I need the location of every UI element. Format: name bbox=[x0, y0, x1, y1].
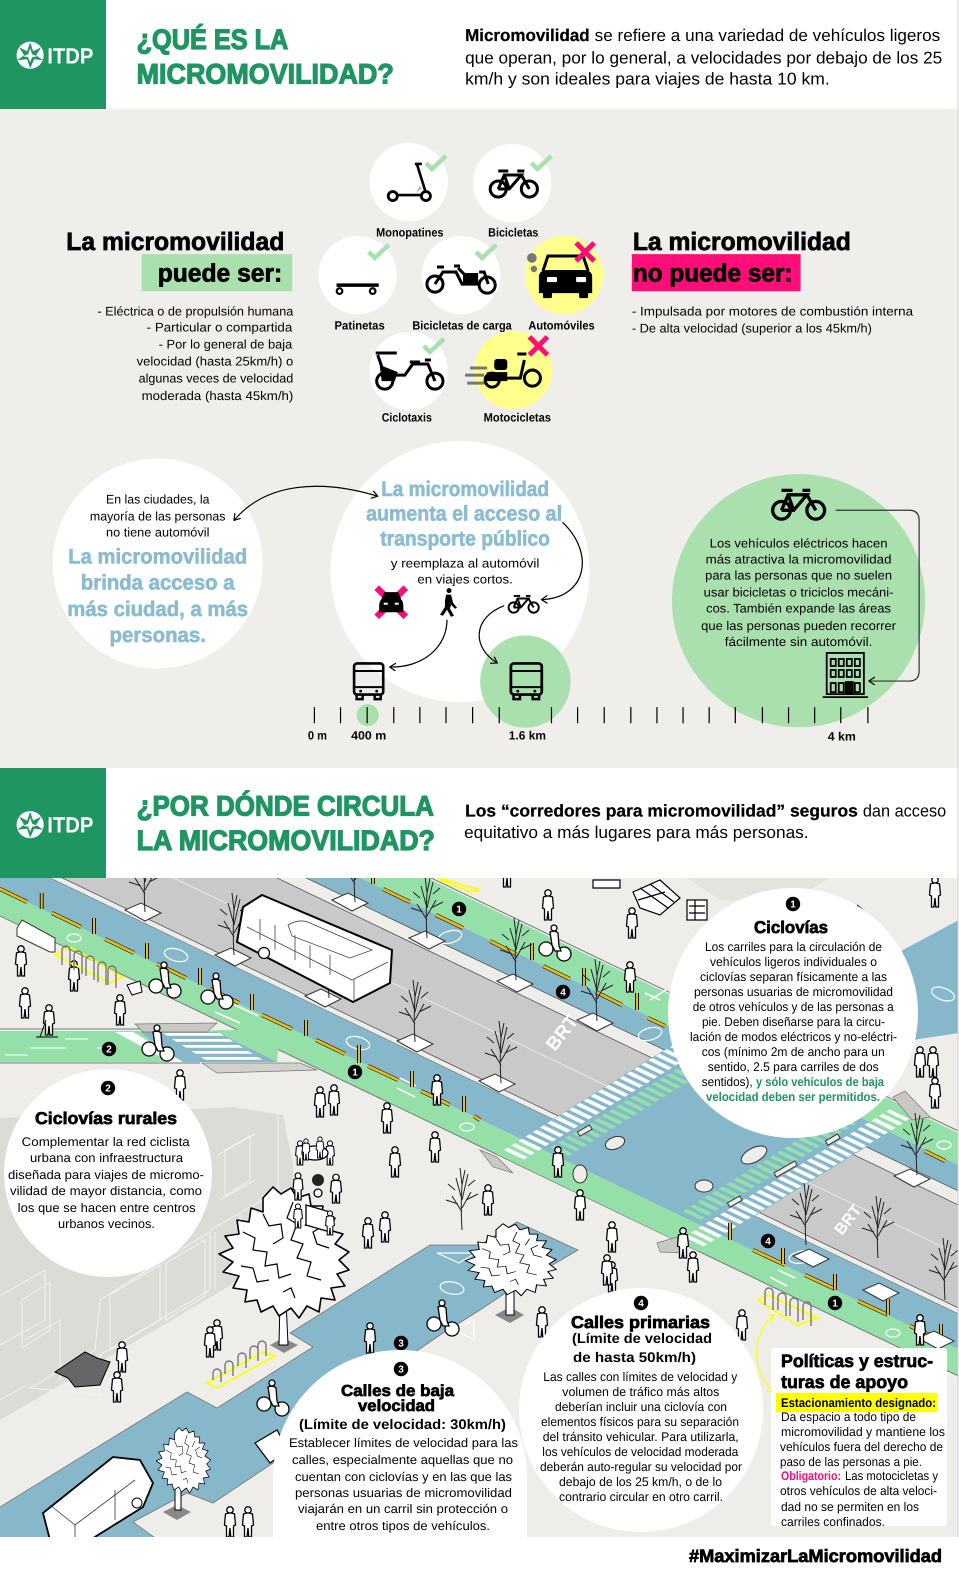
intro text: dan acceso bbox=[863, 802, 946, 821]
body: otros vehículos de alta veloci- bbox=[780, 1484, 937, 1498]
body: Establecer límites de velocidad para las bbox=[289, 1436, 518, 1450]
icon: motocicletas: Motocicletas bbox=[484, 410, 551, 424]
body bbox=[540, 1370, 742, 1504]
cross street NE bbox=[902, 920, 958, 1040]
list: no puede ser: - Impulsada por motores de combustión interna bbox=[632, 304, 913, 318]
distance scale bbox=[308, 704, 868, 743]
body bbox=[289, 1436, 518, 1533]
icon: motocicletas bbox=[465, 331, 552, 424]
ticks bbox=[314, 707, 868, 723]
body: cos (mínimo 2m de ancho para un bbox=[702, 1045, 885, 1059]
body: sentidos), bbox=[702, 1075, 753, 1089]
body: vehículos fuera del derecho de bbox=[780, 1440, 943, 1454]
BRT road text: BRT bbox=[542, 1011, 583, 1055]
heading: velocidad bbox=[358, 1398, 435, 1415]
badge 3: 3 bbox=[398, 1364, 404, 1376]
body: elementos físicos para su separación bbox=[541, 1415, 739, 1429]
panel: ciclovias bbox=[668, 888, 918, 1138]
body: Obligatorio: bbox=[781, 1469, 841, 1483]
illustration: isometric street: BRT bbox=[832, 1202, 866, 1238]
icon: edificio bbox=[823, 653, 868, 697]
intro text bbox=[465, 26, 942, 88]
body: paso de las personas a pie. bbox=[780, 1455, 922, 1469]
text: acceso: mayoría de las personas bbox=[90, 509, 226, 523]
hashtag: #MaximizarLaMicromovilidad bbox=[689, 1546, 942, 1566]
text: acceso: no tiene automóvil bbox=[106, 525, 209, 539]
icon: bicicletas: Bicicletas bbox=[488, 225, 539, 239]
text: acceso: En las ciudades, la bbox=[106, 492, 209, 506]
icon: bicicletas de carga bbox=[412, 236, 512, 332]
scale labels: 1.6 km bbox=[509, 728, 546, 742]
text: electricos: más atractiva la micromovilidad bbox=[706, 552, 892, 567]
buildings bbox=[0, 878, 830, 1420]
arrow: peaton a bus bbox=[390, 620, 447, 667]
text: electricos: para las personas que no suelen bbox=[705, 569, 892, 583]
heading bbox=[299, 1383, 506, 1432]
circle left bbox=[53, 459, 263, 668]
body: carriles confinados. bbox=[781, 1515, 885, 1529]
text: electricos: cos. También expande las áreas bbox=[706, 602, 891, 616]
body: calles, especialmente aquellas que no bbox=[292, 1453, 513, 1467]
body: Las calles con límites de velocidad y bbox=[543, 1370, 738, 1384]
body: entre otros tipos de vehículos. bbox=[316, 1519, 490, 1533]
text: electricos: fácilmente sin automóvil. bbox=[725, 635, 872, 649]
list: no puede ser bbox=[632, 304, 913, 336]
body: Los carriles para la circulación de bbox=[705, 940, 882, 954]
text: acceso: personas. bbox=[109, 624, 206, 647]
badge 2 bbox=[101, 1081, 115, 1095]
body: contrario circular en otro carril. bbox=[559, 1490, 723, 1504]
upper page content bbox=[17, 24, 946, 856]
highlight: estacionamiento: Estacionamiento designado: bbox=[781, 1396, 936, 1410]
heading bbox=[781, 1351, 933, 1392]
scale labels: 4 km bbox=[828, 729, 856, 743]
illustration: isometric street bbox=[0, 878, 958, 1537]
heading: de hasta 50km/h) bbox=[573, 1349, 696, 1365]
heading: no puede ser bbox=[632, 228, 851, 291]
van bbox=[43, 1457, 153, 1540]
logo block second header bbox=[0, 768, 106, 878]
arrow: yellow to bike parking bbox=[757, 1315, 774, 1392]
heading: Ciclovías rurales bbox=[35, 1109, 177, 1128]
list: puede ser: algunas veces de velocidad bbox=[139, 372, 293, 386]
crosswalks bbox=[514, 1027, 900, 1242]
body: urbana con infraestructura bbox=[30, 1151, 183, 1165]
title: MICROMOVILIDAD? bbox=[137, 58, 394, 89]
badge 2: 2 bbox=[105, 1084, 111, 1094]
text: acceso bbox=[67, 492, 248, 647]
body: vehículos ligeros individuales o bbox=[710, 955, 877, 969]
panel: la micromovilidad puede ser bbox=[66, 228, 293, 403]
body: cuentan con ciclovías y en las que las bbox=[295, 1470, 512, 1484]
icon: bus bbox=[354, 663, 383, 699]
body: deberían incluir una ciclovía con bbox=[555, 1400, 727, 1414]
icon: automoviles: Automóviles bbox=[528, 318, 595, 332]
heading: puede ser: La micromovilidad bbox=[66, 228, 284, 256]
location badges: 1 bbox=[832, 1298, 838, 1310]
heading: puede ser bbox=[66, 228, 292, 291]
heading: Ciclovías bbox=[754, 918, 828, 937]
planters and street trees bbox=[125, 840, 959, 1349]
panel: politicas y estructuras de apoyo bbox=[771, 1348, 947, 1529]
text: transporte bbox=[366, 478, 562, 587]
heading: Calles primarias bbox=[571, 1313, 710, 1332]
list: puede ser: - Por lo general de baja bbox=[159, 338, 292, 352]
right edge line bbox=[957, 0, 959, 1537]
intro text: se refiere a una variedad de vehículos ligeros bbox=[595, 26, 940, 45]
body bbox=[780, 1410, 945, 1529]
text: electricos bbox=[701, 536, 896, 649]
planter bbox=[127, 981, 142, 995]
arrow: a bicicleta bbox=[541, 522, 582, 600]
body: deberán auto-regular su velocidad por bbox=[540, 1460, 742, 1474]
heading: Políticas y estruc- bbox=[781, 1351, 933, 1371]
text: acceso: La micromovilidad bbox=[68, 545, 247, 569]
location badges: 4 bbox=[560, 988, 566, 998]
kerb corners bbox=[480, 1091, 930, 1253]
location badges: 3 bbox=[398, 1338, 404, 1350]
panel: calles de baja velocidad bbox=[273, 1350, 527, 1537]
text: transporte: aumenta el acceso al bbox=[366, 502, 562, 525]
body: y sólo vehículos de baja bbox=[756, 1075, 885, 1089]
location badges: 1 bbox=[456, 904, 462, 916]
refuge islands bbox=[573, 1125, 840, 1207]
people bbox=[16, 857, 940, 1537]
title: LA MICROMOVILIDAD? bbox=[137, 825, 435, 856]
heading: puede ser: puede ser: bbox=[158, 259, 282, 287]
text: electricos: que las personas pueden recorrer bbox=[701, 619, 896, 633]
intro text bbox=[464, 802, 946, 842]
body: volumen de tráfico más altos bbox=[562, 1385, 719, 1399]
body: los que se hacen entre centros bbox=[18, 1201, 196, 1215]
scale labels: 0 m bbox=[308, 728, 327, 742]
title bbox=[137, 791, 435, 856]
lane 2 bbox=[0, 1023, 317, 1073]
text: transporte: en viajes cortos. bbox=[417, 573, 513, 587]
badge 3 bbox=[394, 1362, 408, 1376]
body bbox=[690, 940, 897, 1104]
body: personas usuarias de micromovilidad bbox=[694, 985, 893, 999]
icon: ciclotaxis bbox=[370, 332, 448, 424]
text: transporte: y reemplaza al automóvil bbox=[391, 556, 539, 571]
circle: 1.6 km bbox=[480, 635, 571, 728]
location badges: 4 bbox=[765, 1236, 771, 1248]
icon: ciclotaxis: Ciclotaxis bbox=[382, 410, 432, 424]
title bbox=[137, 24, 394, 89]
title: ¿POR DÓNDE CIRCULA bbox=[137, 791, 434, 822]
heading: Calles de baja bbox=[341, 1383, 454, 1400]
title: ¿QUÉ ES LA bbox=[137, 24, 288, 55]
barrier bbox=[17, 920, 55, 952]
icon: bici electrica bbox=[773, 490, 825, 519]
heading: no puede ser: La micromovilidad bbox=[633, 228, 851, 256]
body: dad no se permiten en los bbox=[781, 1500, 919, 1514]
badge 1: 1 bbox=[790, 900, 796, 910]
road lanes: grey, medians, blue, green bbox=[0, 878, 958, 1376]
badge 4: 4 bbox=[638, 1298, 644, 1310]
icon: auto tachado bbox=[377, 588, 406, 617]
list: puede ser: - Particular o compartida bbox=[147, 320, 292, 334]
separators bbox=[0, 888, 945, 1340]
small car bbox=[254, 1429, 280, 1464]
speed markings bbox=[67, 928, 956, 1337]
circle middle bbox=[330, 441, 590, 702]
panel: la micromovilidad no puede ser bbox=[632, 228, 913, 336]
icon: bicicleta bbox=[509, 596, 539, 613]
body: vilidad de mayor distancia, como bbox=[10, 1184, 202, 1198]
list: puede ser bbox=[97, 304, 293, 403]
badge 4 bbox=[634, 1296, 648, 1310]
body: sentido, 2.5 para carriles de dos bbox=[708, 1060, 879, 1074]
arrows bbox=[234, 486, 919, 681]
body: de otros vehículos y de las personas a bbox=[693, 1000, 894, 1014]
highlight: estacionamiento bbox=[776, 1393, 937, 1412]
icon: patinetas bbox=[318, 236, 397, 332]
body: pie. Deben diseñarse para la circu- bbox=[702, 1015, 885, 1029]
text: transporte: transporte público bbox=[380, 527, 550, 550]
scale labels bbox=[308, 728, 856, 743]
list: puede ser: moderada (hasta 45km/h) bbox=[142, 389, 293, 403]
icon: automoviles bbox=[525, 236, 603, 332]
intro text: Micromovilidad bbox=[465, 26, 590, 45]
cafe tables bbox=[293, 1137, 342, 1235]
body: lación de modos eléctricos y no-eléctri- bbox=[690, 1030, 897, 1044]
text: acceso: brinda acceso a bbox=[81, 572, 235, 595]
icon: peaton bbox=[440, 588, 457, 617]
body: urbanos vecinos. bbox=[58, 1217, 155, 1231]
intro text: Los “corredores para micromovilidad” seguros bbox=[465, 802, 858, 821]
panel: calles primarias bbox=[519, 1288, 763, 1532]
body: Las motocicletas y bbox=[845, 1469, 939, 1483]
bike parking racks bbox=[55, 878, 818, 1388]
logo block top bbox=[0, 0, 106, 109]
location badges: 1 bbox=[352, 1068, 358, 1078]
text: acceso: más ciudad, a más bbox=[67, 598, 248, 621]
icon: monopatines bbox=[370, 143, 448, 239]
text: electricos: usar bicicletas o triciclos mecáni- bbox=[704, 586, 894, 600]
header: que es la micromovilidad bbox=[17, 24, 942, 89]
low street triangle markings bbox=[437, 1253, 476, 1340]
low speed street bbox=[0, 1222, 578, 1545]
vehicle icons bbox=[318, 143, 603, 424]
panel: brinda acceso bbox=[53, 459, 263, 668]
logo: ITDP bbox=[17, 811, 93, 838]
location badges bbox=[102, 902, 842, 1350]
panel: transporte publico bbox=[330, 441, 590, 702]
marker 400 m bbox=[357, 704, 379, 726]
heading bbox=[571, 1313, 712, 1365]
bus bbox=[237, 895, 392, 1002]
heading: (Límite de velocidad: 30km/h) bbox=[299, 1416, 506, 1432]
heading: (Límite de velocidad bbox=[572, 1330, 712, 1346]
intersection bbox=[496, 1046, 911, 1251]
arrow: circulo a transporte bbox=[234, 486, 378, 520]
street market bbox=[55, 1352, 110, 1387]
body: diseñada para viajes de micromo- bbox=[8, 1168, 204, 1182]
body: del tránsito vehicular. Para utilizarla, bbox=[543, 1430, 739, 1444]
logo: ITDP bbox=[17, 42, 93, 69]
badge 1 bbox=[786, 897, 800, 911]
icon: bicicletas bbox=[473, 144, 551, 239]
heading: turas de apoyo bbox=[781, 1372, 908, 1392]
panel: ciclovias rurales bbox=[4, 1069, 212, 1277]
intro text: km/h y son ideales para viajes de hasta 10 km. bbox=[465, 69, 830, 88]
scale labels: 400 m bbox=[351, 728, 386, 742]
bollards bbox=[42, 878, 941, 1340]
intro text: equitativo a más lugares para más personas. bbox=[464, 823, 809, 842]
ground bbox=[0, 878, 958, 1537]
big trees bbox=[156, 1187, 556, 1520]
list: puede ser: - Eléctrica o de propulsión humana bbox=[97, 304, 293, 318]
icon: patinetas: Patinetas bbox=[334, 318, 385, 332]
body: personas usuarias de micromovilidad bbox=[295, 1486, 512, 1500]
body: velocidad deben ser permitidos. bbox=[706, 1090, 880, 1104]
top right kiosk bbox=[592, 879, 866, 921]
panel: top grey background bbox=[0, 109, 958, 768]
list: puede ser: velocidad (hasta 25km/h) o bbox=[137, 355, 293, 369]
text: electricos: Los vehículos eléctricos hacen bbox=[710, 536, 888, 550]
text: transporte: La micromovilidad bbox=[381, 478, 549, 501]
heading: no puede ser: no puede ser: bbox=[633, 259, 793, 287]
lane arrows bbox=[215, 990, 795, 1286]
body: viajarán en un carril sin protección o bbox=[298, 1502, 508, 1516]
list: no puede ser: - De alta velocidad (superior a los 45km/h) bbox=[632, 321, 872, 336]
body: Da espacio a todo tipo de bbox=[781, 1410, 916, 1424]
panel: vehiculos electricos bbox=[672, 474, 925, 727]
arrow: bici electrica a edificio bbox=[836, 510, 919, 681]
body bbox=[8, 1135, 204, 1231]
icon: monopatines: Monopatines bbox=[376, 225, 444, 239]
location badges: 2 bbox=[106, 1044, 112, 1056]
body: micromovilidad y mantiene los bbox=[781, 1425, 945, 1439]
body: ciclovías separan físicamente a las bbox=[700, 970, 887, 984]
body: Complementar la red ciclista bbox=[22, 1135, 190, 1149]
header: por donde circula bbox=[17, 791, 946, 856]
body: los vehículos de velocidad moderada bbox=[542, 1445, 738, 1459]
arrow: bici a bus bbox=[479, 606, 504, 663]
intro text: que operan, por lo general, a velocidades por debajo de los 25 bbox=[465, 48, 942, 67]
icon: bicicletas de carga: Bicicletas de carga bbox=[412, 318, 512, 332]
body: debajo de los 25 km/h, o de lo bbox=[559, 1475, 722, 1489]
